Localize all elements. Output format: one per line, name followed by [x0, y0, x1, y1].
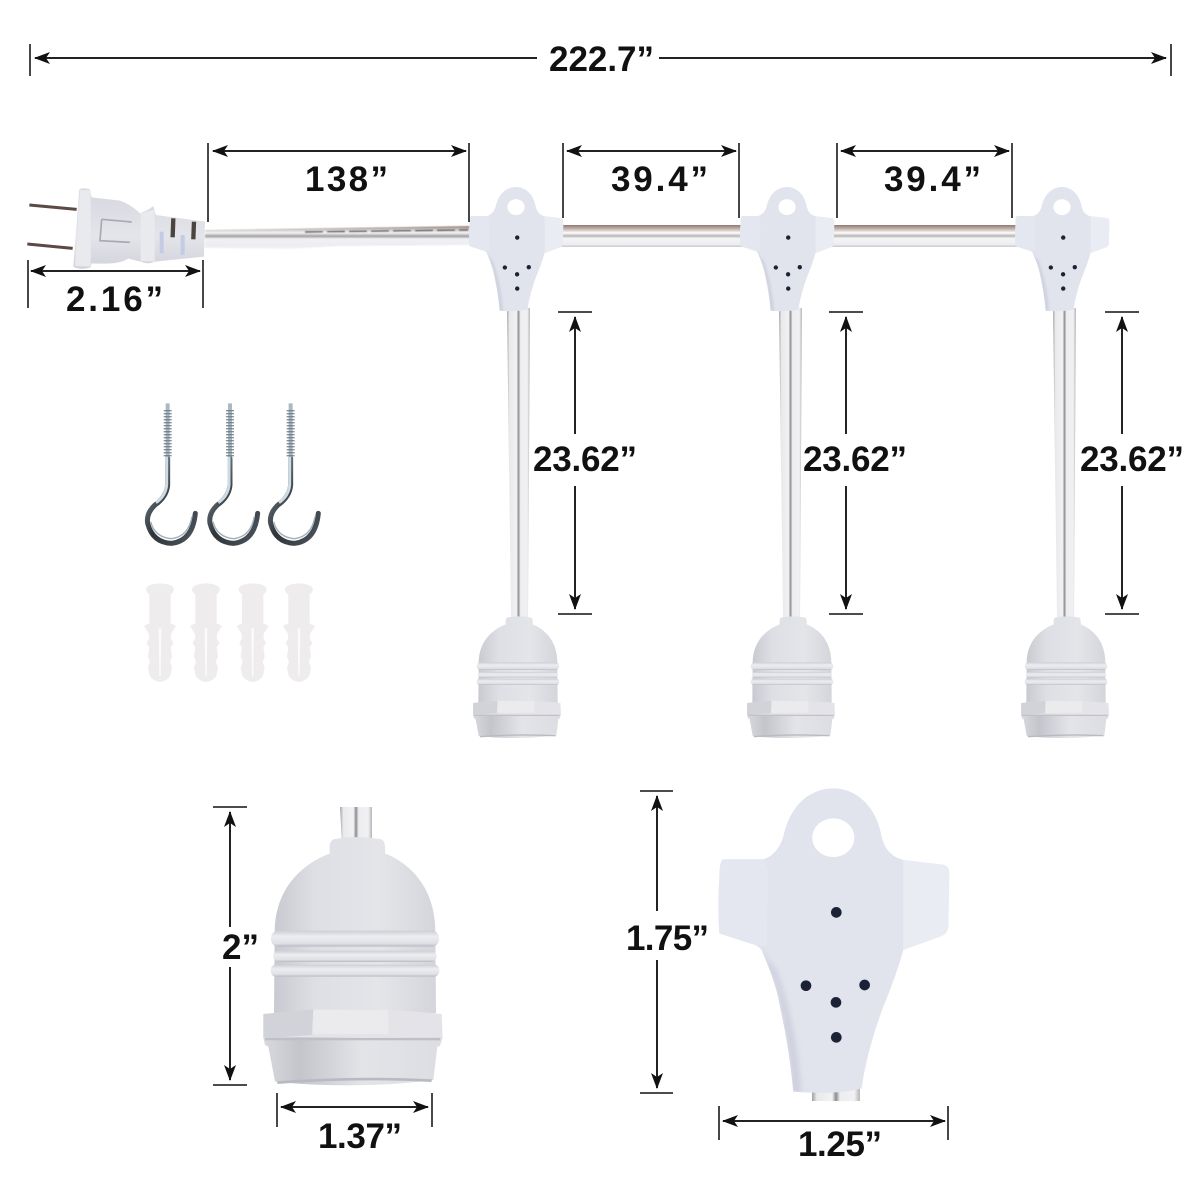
lamp socket 2: [747, 616, 835, 738]
dimension: connector width 1.25: 1.25”: [798, 1125, 882, 1164]
T connector 3: [1013, 187, 1111, 311]
dimension: spacing 39.4 first: 39.4”: [611, 160, 708, 199]
dimension: plug length 2.16: 2.16”: [66, 280, 163, 319]
plug: [27, 188, 205, 269]
enlarged socket: [263, 807, 443, 1085]
connector 2 cord: [779, 308, 802, 618]
T connector 2: [738, 187, 836, 311]
lamp socket 3: [1021, 616, 1109, 738]
cable: plug to first connector: [205, 226, 470, 249]
connector 1 cord: [507, 308, 530, 618]
dimension: drop length 23.62 second: 23.62”: [803, 440, 907, 479]
lamp socket 1: [473, 616, 561, 738]
cable: second to third connector: [832, 225, 1018, 247]
dimension: socket width 1.37: 1.37”: [318, 1117, 402, 1156]
dimension: spacing 39.4 second: 39.4”: [884, 160, 981, 199]
connector 3 cord: [1053, 308, 1076, 618]
dimension: drop length 23.62 first: 23.62”: [533, 440, 637, 479]
cup hooks: [147, 403, 318, 543]
dimension: drop length 23.62 third: 23.62”: [1080, 440, 1184, 479]
dimension: connector height 1.75: 1.75”: [626, 919, 709, 958]
enlarged T connector: [713, 788, 953, 1101]
wall anchors: [144, 583, 315, 682]
cable: first to second connector: [560, 225, 745, 247]
dimension: overall length 222.7: 222.7”: [549, 40, 654, 79]
dimension: lead length 138: 138”: [305, 160, 388, 199]
dimension: socket height 2: 2”: [222, 928, 259, 967]
T connector 1: [467, 187, 565, 311]
